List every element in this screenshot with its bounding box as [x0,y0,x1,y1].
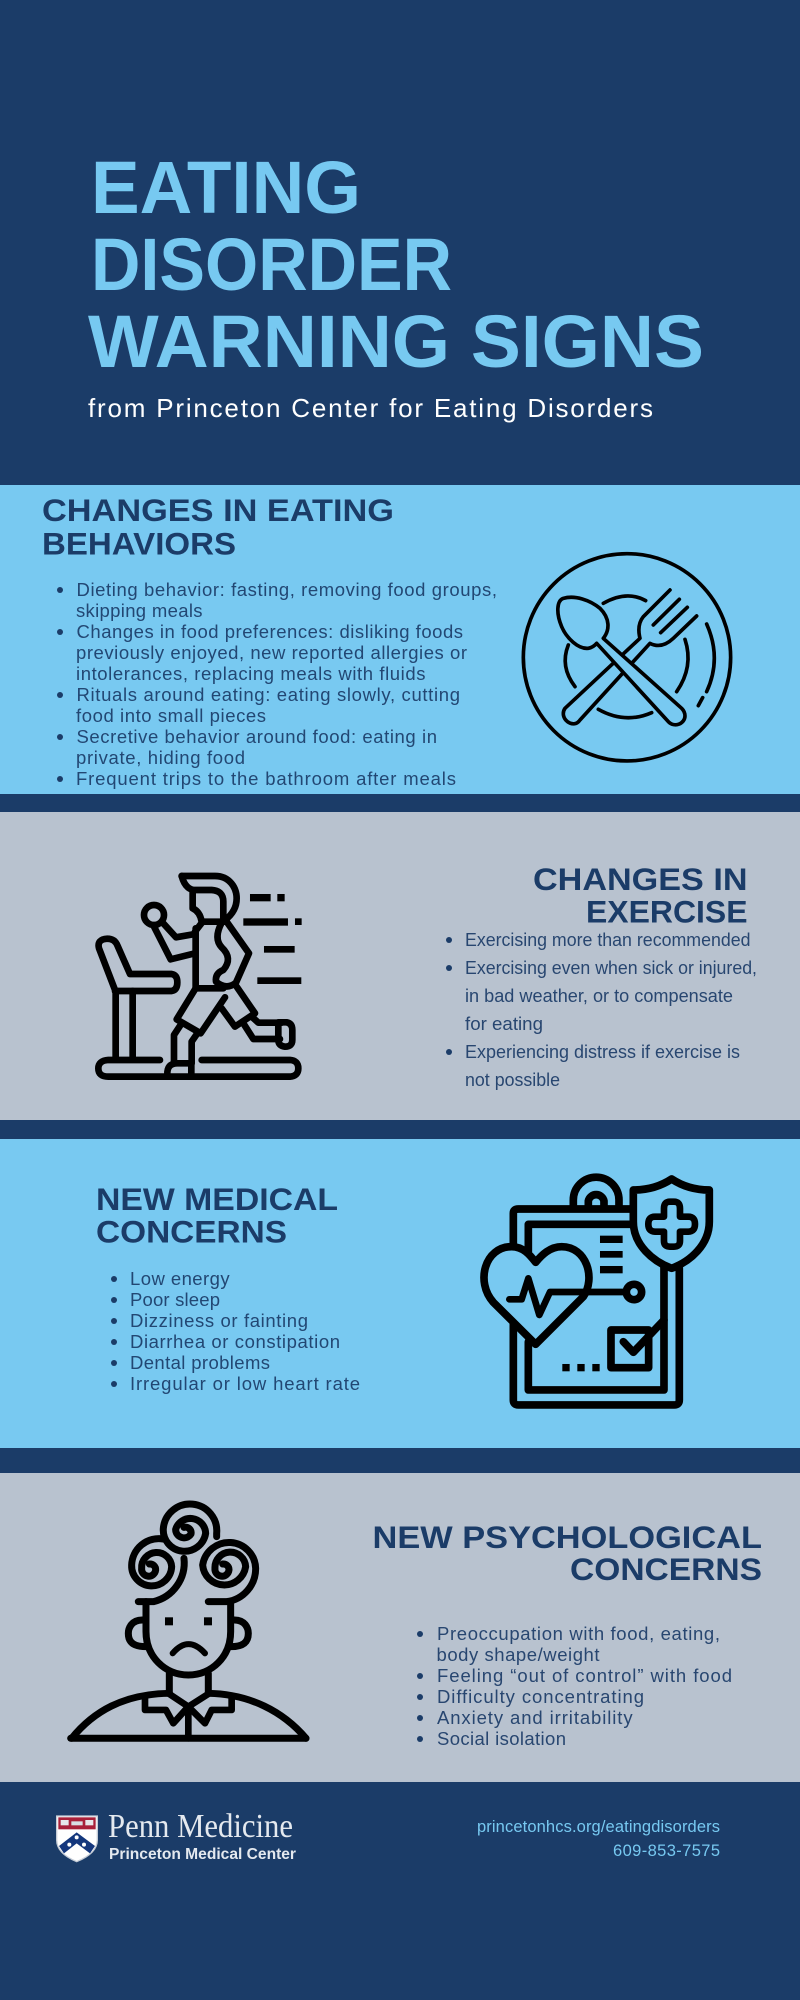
panel: changes in exercise [0,812,800,1120]
icon: plate with crossed fork and spoon [523,554,731,761]
heading: new medical concerns: NEW MEDICAL [96,1181,338,1217]
list: medical: Dizziness or fainting [130,1310,308,1331]
heading: changes in eating behaviors: CHANGES IN EATING [42,492,394,528]
heading: changes in exercise: EXERCISE [586,894,748,930]
list: psychological: Preoccupation with food, eating, [437,1623,720,1644]
list: medical: Diarrhea or constipation [130,1331,340,1352]
heading: changes in eating behaviors: BEHAVIORS [42,526,236,562]
list: medical: Irregular or low heart rate [130,1373,360,1394]
title: EATING [91,146,361,229]
list: eating behaviors: previously enjoyed, new reported allergies or [76,642,467,663]
list: exercise: Exercising even when sick or injured, [465,957,757,978]
list: medical [111,1268,360,1394]
list: medical: Poor sleep [130,1289,220,1310]
footer logo: Penn Medicine Princeton Medical Center [57,1808,296,1863]
list: eating behaviors: Frequent trips to the bathroom after meals [76,768,456,789]
list: eating behaviors: Rituals around eating: eating slowly, cutting [76,684,460,705]
list: psychological [417,1623,732,1749]
list: psychological: Social isolation [437,1728,566,1749]
heading: new medical concerns [96,1181,338,1250]
footer logo: Penn Medicine Princeton Medical Center: Princeton Medical Center [109,1846,296,1863]
list: exercise: in bad weather, or to compensate [465,985,733,1006]
icon: Penn shield [57,1816,97,1862]
subtitle: from Princeton Center for Eating Disorders [88,393,653,423]
list: exercise: for eating [465,1013,543,1034]
heading: new medical concerns: CONCERNS [96,1214,287,1250]
heading: new psychological concerns [372,1519,762,1587]
list: psychological: Difficulty concentrating [437,1686,644,1707]
title: DISORDER [91,223,452,306]
list: eating behaviors: skipping meals [76,600,202,621]
footer contact: princetonhcs.org/eatingdisorders [477,1818,720,1836]
panel: new psychological concerns [0,1473,800,1782]
icon: sad person with spiral curls [71,1504,306,1738]
list: exercise: Exercising more than recommended [465,929,750,950]
title [88,146,704,383]
panel: new medical concerns [0,1139,800,1448]
list: eating behaviors: Dieting behavior: fasting, removing food groups, [76,579,497,600]
heading: changes in exercise [533,861,748,930]
list: psychological: Anxiety and irritability [437,1707,633,1728]
footer logo: Penn Medicine Princeton Medical Center: Penn Medicine [108,1808,293,1845]
panel: changes in eating behaviors [0,485,800,794]
heading: new psychological concerns: CONCERNS [570,1551,762,1587]
list: exercise: not possible [465,1069,560,1090]
title: WARNING SIGNS [88,300,704,383]
list: psychological: body shape/weight [436,1644,600,1665]
icon: medical clipboard with heart and shield [484,1177,709,1405]
heading: new psychological concerns: NEW PSYCHOLOGICAL [372,1519,762,1555]
list: exercise: Experiencing distress if exercise is [465,1041,740,1062]
list: eating behaviors: private, hiding food [76,747,245,768]
heading: changes in eating behaviors [42,492,394,562]
list: exercise [446,929,757,1090]
list: psychological: Feeling “out of control” with food [437,1665,732,1686]
list: eating behaviors: Changes in food preferences: disliking foods [76,621,463,642]
list: eating behaviors: food into small pieces [76,705,266,726]
heading: changes in exercise: CHANGES IN [533,861,748,897]
list: eating behaviors [57,579,497,789]
list: medical: Low energy [130,1268,230,1289]
list: eating behaviors: Secretive behavior around food: eating in [76,726,437,747]
list: medical: Dental problems [130,1352,270,1373]
footer contact: 609-853-7575 [613,1842,720,1860]
icon: person running on treadmill [98,876,302,1077]
footer contact [477,1818,720,1860]
list: eating behaviors: intolerances, replacing meals with fluids [76,663,426,684]
